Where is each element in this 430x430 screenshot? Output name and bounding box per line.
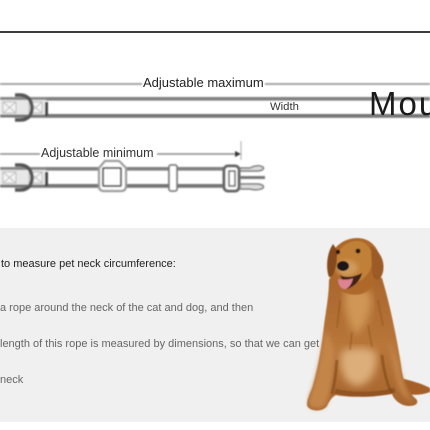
label: width: Width [270, 101, 299, 113]
top rule [0, 31, 430, 33]
head [329, 238, 381, 295]
ears [327, 244, 337, 277]
mouth [340, 273, 362, 289]
right leg [388, 340, 414, 403]
muzzle [336, 260, 358, 276]
label: adjustable minimum: Adjustable minimum [41, 146, 154, 160]
eyes [336, 250, 340, 254]
panel: measuring instructions background [0, 228, 430, 422]
heading: how to measure: to measure pet neck circumference: [1, 258, 176, 270]
text: step line three: neck [0, 374, 23, 386]
collar at maximum length [0, 84, 430, 120]
fur streaks [337, 300, 383, 350]
nose [337, 261, 349, 271]
left leg [309, 330, 335, 409]
diagram: collar at maximum and minimum length [0, 82, 430, 194]
chest fur [340, 348, 376, 386]
text: step line two: length of this rope is measured by dimensions, so that we can get [0, 338, 319, 350]
label: adjustable maximum: Adjustable maximum [143, 75, 264, 90]
collar at minimum length [0, 141, 265, 191]
neck ruff [344, 288, 372, 335]
body [307, 268, 417, 410]
tongue [338, 278, 353, 289]
leg and belly shading [332, 360, 337, 394]
tail [401, 378, 430, 395]
text: step line one: a rope around the neck of the cat and dog, and then [0, 302, 253, 314]
